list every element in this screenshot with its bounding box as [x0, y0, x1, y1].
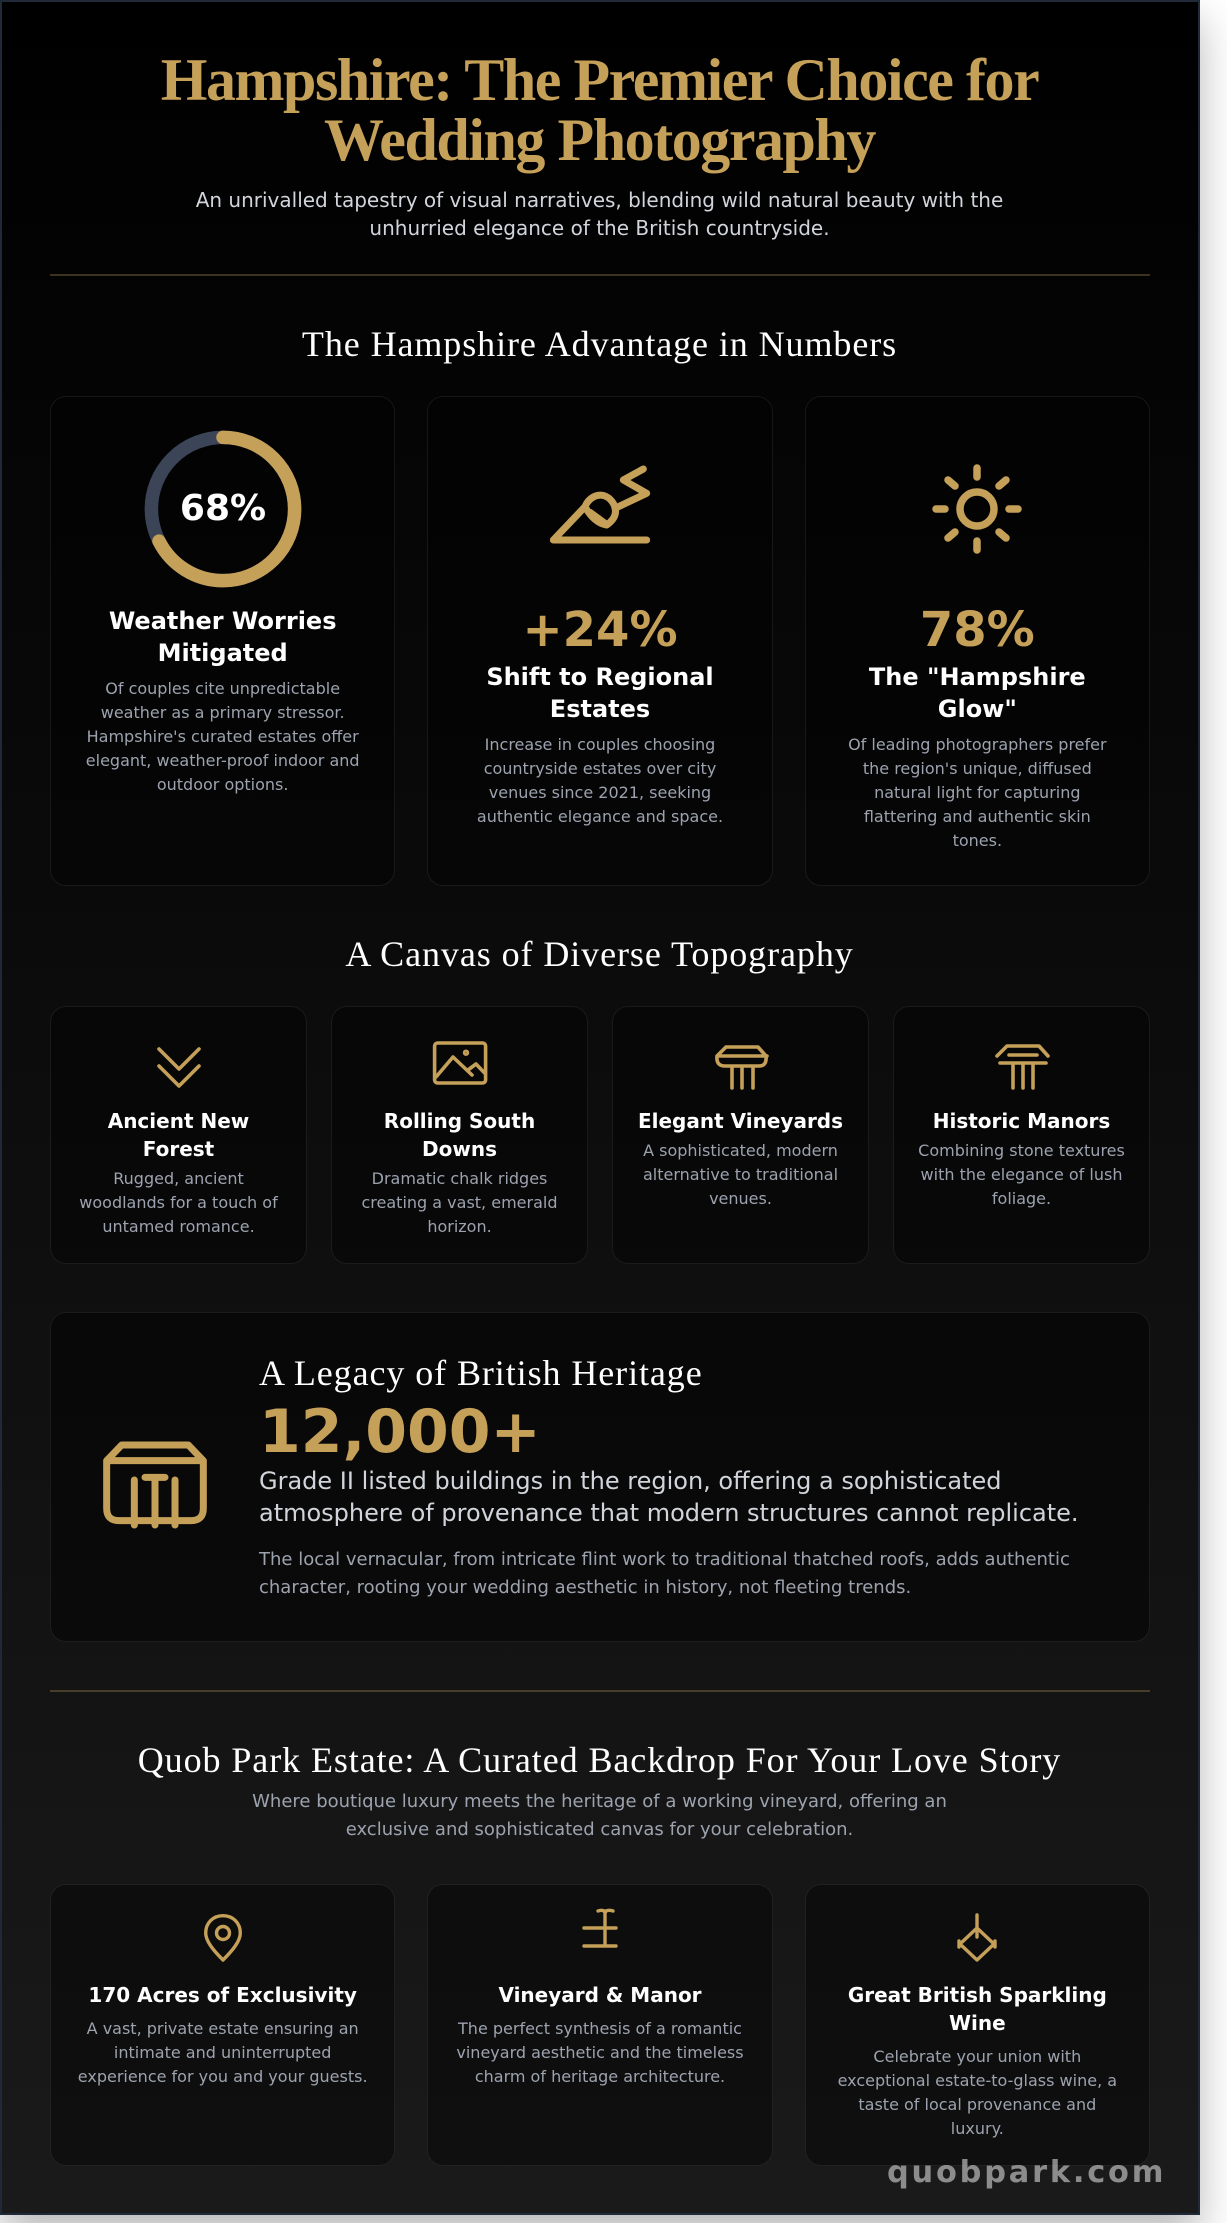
panel: regional estates stat card: [427, 396, 773, 886]
card text: untamed romance.: [102, 1217, 255, 1236]
card text: foliage.: [992, 1189, 1051, 1208]
card text: creating a vast, emerald: [362, 1193, 557, 1212]
card text: Rugged, ancient: [113, 1169, 244, 1188]
icon: double chevron: [157, 1047, 201, 1088]
title: Wedding Photography: [324, 107, 875, 173]
card text: [78, 2019, 368, 2086]
card text: Of couples cite unpredictable: [105, 679, 340, 698]
card text: elegant, weather-proof indoor and: [86, 751, 360, 770]
watermark: quobpark.com: [887, 2155, 1166, 2190]
panel: british heritage: [50, 1312, 1150, 1642]
card text: exceptional estate-to-glass wine, a: [838, 2071, 1117, 2090]
icon: trellis: [582, 1908, 618, 1948]
stat value: 78%: [920, 602, 1035, 658]
panel: sparkling wine: [805, 1884, 1150, 2166]
card title: Ancient New: [108, 1109, 249, 1133]
donut chart: 68%: 68%: [180, 488, 266, 528]
subtitle: An unrivalled tapestry of visual narratives, blending wild natural beauty with the: [196, 188, 1003, 212]
card text: horizon.: [427, 1217, 492, 1236]
card title: Weather Worries: [109, 606, 336, 634]
card title: Mitigated: [158, 638, 288, 666]
card text: intimate and uninterrupted: [114, 2043, 331, 2062]
lead text: Grade II listed buildings in the region, offering a sophisticated: [259, 1466, 1002, 1494]
card title: Historic Manors: [933, 1109, 1110, 1133]
donut chart: 68%: [144, 430, 302, 588]
card text: tones.: [953, 831, 1002, 850]
icon: column: [715, 1045, 769, 1090]
stat value: +24%: [522, 602, 678, 658]
heading: advantage in numbers: The Hampshire Advantage in Numbers: [302, 324, 897, 364]
card text: [848, 735, 1107, 850]
card text: venues since 2021, seeking: [489, 783, 711, 802]
panel: hampshire glow stat card: [805, 396, 1150, 886]
card title: [108, 1109, 249, 1161]
lead text: [259, 1466, 1079, 1526]
card text: flattering and authentic skin: [864, 807, 1091, 826]
lead text: atmosphere of provenance that modern structures cannot replicate.: [259, 1498, 1079, 1526]
card text: countryside estates over city: [484, 759, 716, 778]
card text: Dramatic chalk ridges: [372, 1169, 547, 1188]
card text: [918, 1141, 1125, 1208]
intro text: Where boutique luxury meets the heritage of a working vineyard, offering an: [252, 1791, 947, 1812]
card text: [362, 1169, 557, 1236]
panel: vineyards: [612, 1006, 869, 1264]
subtitle: unhurried elegance of the British countryside.: [369, 216, 830, 240]
card text: [456, 2019, 744, 2086]
card text: Of leading photographers prefer: [848, 735, 1107, 754]
supporting text: character, rooting your wedding aesthetic in history, not fleeting trends.: [259, 1576, 911, 1598]
card text: weather as a primary stressor.: [101, 703, 345, 722]
card text: charm of heritage architecture.: [475, 2067, 725, 2086]
supporting text: The local vernacular, from intricate flint work to traditional thatched roofs, adds authentic: [259, 1548, 1070, 1570]
icon: map pin: [204, 1914, 242, 1962]
card title: Wine: [949, 2011, 1006, 2035]
card title: Rolling South: [384, 1109, 535, 1133]
panel: new forest: [50, 1006, 307, 1264]
stat value: 12,000+: [259, 1397, 541, 1467]
card text: woodlands for a touch of: [79, 1193, 278, 1212]
heading: A Legacy of British Heritage: [259, 1353, 703, 1393]
card text: luxury.: [951, 2119, 1004, 2138]
panel: south downs: [331, 1006, 588, 1264]
icon: classical column: [995, 1044, 1050, 1090]
panel: acres: [50, 1884, 395, 2166]
card title: Glow": [938, 695, 1017, 723]
title: Hampshire: The Premier Choice for: [161, 47, 1038, 113]
icon: sun: [932, 464, 1022, 554]
card text: [79, 1169, 278, 1236]
heading: quob park: Quob Park Estate: A Curated Backdrop For Your Love Story: [138, 1740, 1061, 1780]
icon: landscape: [550, 466, 650, 544]
card text: A sophisticated, modern: [643, 1141, 838, 1160]
card text: Hampshire's curated estates offer: [87, 727, 359, 746]
intro text: [252, 1791, 947, 1840]
supporting text: [258, 1548, 1070, 1598]
intro text: exclusive and sophisticated canvas for your celebration.: [346, 1819, 853, 1840]
subtitle: [196, 188, 1003, 240]
card title: Vineyard & Manor: [498, 1983, 702, 2007]
card title: Elegant Vineyards: [638, 1109, 843, 1133]
card title: [109, 606, 336, 666]
card text: vineyard aesthetic and the timeless: [456, 2043, 744, 2062]
card text: [86, 679, 360, 794]
card text: Celebrate your union with: [873, 2047, 1081, 2066]
card text: [643, 1141, 838, 1208]
card text: venues.: [709, 1189, 772, 1208]
card text: The perfect synthesis of a romantic: [458, 2019, 742, 2038]
card title: [848, 1983, 1107, 2035]
heading: diverse topography: A Canvas of Diverse Topography: [345, 934, 854, 974]
card title: The "Hampshire: [869, 663, 1086, 691]
card title: Forest: [143, 1137, 214, 1161]
card text: natural light for capturing: [874, 783, 1081, 802]
card text: alternative to traditional: [643, 1165, 838, 1184]
panel: manors: [893, 1006, 1150, 1264]
icon: heritage building: [103, 1442, 207, 1528]
card title: [869, 663, 1086, 723]
card title: Estates: [550, 695, 650, 723]
card title: Downs: [422, 1137, 497, 1161]
card title: [486, 663, 714, 723]
card text: [477, 735, 723, 826]
card text: Increase in couples choosing: [485, 735, 715, 754]
card title: [384, 1109, 535, 1161]
panel: vineyard and manor: [427, 1884, 773, 2166]
card text: [838, 2047, 1117, 2138]
card title: 170 Acres of Exclusivity: [88, 1983, 357, 2007]
icon: image landscape: [432, 1041, 488, 1085]
card text: experience for you and your guests.: [78, 2067, 368, 2086]
icon: wine diamond: [957, 1913, 997, 1962]
card text: the region's unique, diffused: [863, 759, 1092, 778]
card title: Great British Sparkling: [848, 1983, 1107, 2007]
panel: weather stat card: [50, 396, 395, 886]
title: [161, 47, 1038, 174]
card text: Combining stone textures: [918, 1141, 1125, 1160]
card text: authentic elegance and space.: [477, 807, 723, 826]
card title: Shift to Regional: [486, 663, 714, 691]
card text: with the elegance of lush: [921, 1165, 1122, 1184]
card text: taste of local provenance and: [858, 2095, 1096, 2114]
card text: outdoor options.: [157, 775, 288, 794]
card text: A vast, private estate ensuring an: [87, 2019, 359, 2038]
